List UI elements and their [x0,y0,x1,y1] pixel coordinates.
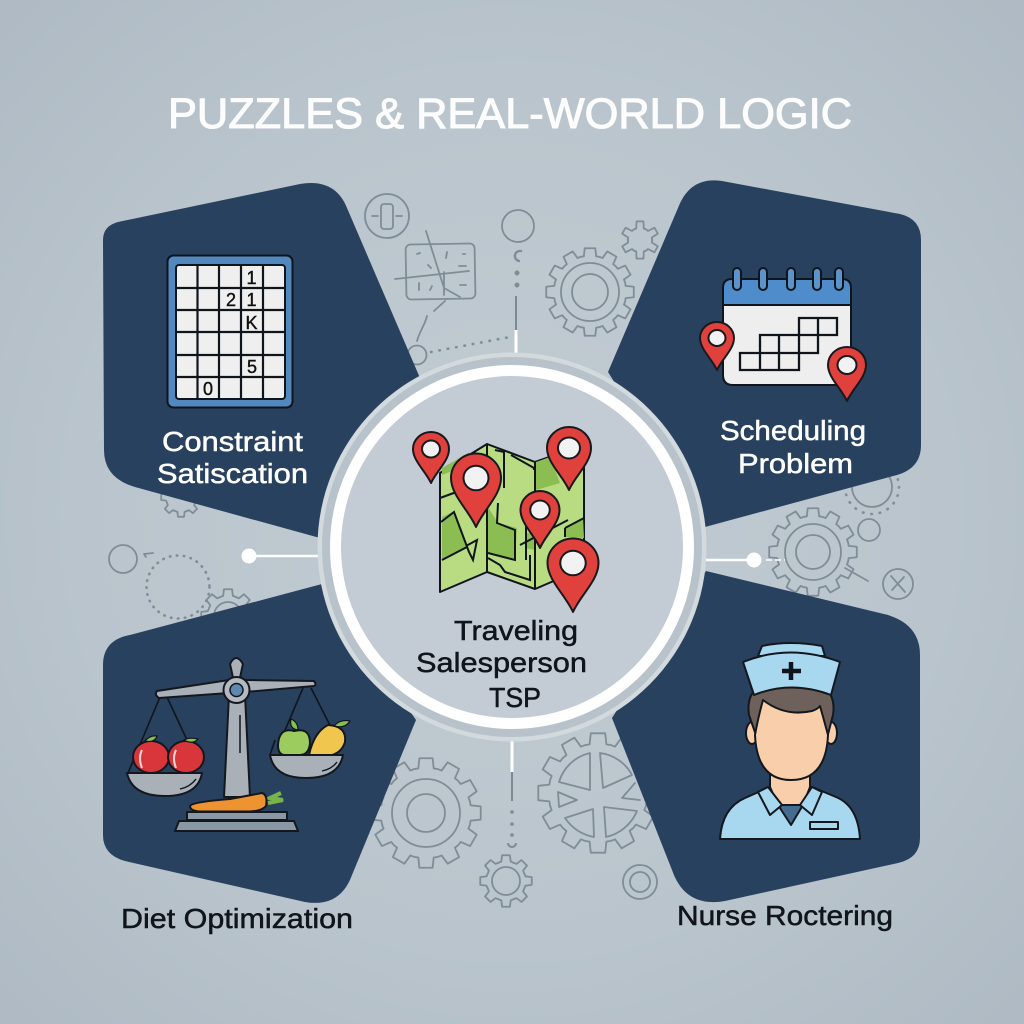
ears [746,722,758,744]
icon: large gear top [546,248,634,336]
icon: map pin 2 [451,454,501,527]
icon: calendar [723,268,851,385]
icon: balance scale with food [127,658,350,831]
icon: map pin 5 [548,538,598,612]
background doodles: gears and logic sketches [109,194,913,907]
neck [770,770,810,805]
icon: puzzle grid [168,256,292,408]
connector: top [515,296,517,353]
left pan [127,773,202,796]
mango [309,725,345,755]
icon: circled slot [365,194,409,238]
name badge [810,822,838,829]
panel: diet optimization [103,584,416,934]
panel shape [608,180,921,527]
label: tsp: TSP [489,682,541,713]
icon: gear behind constraint panel [161,477,201,517]
connector: left [242,548,320,564]
inner disc [341,376,683,718]
connector: bottom [508,740,516,847]
title: PUZZLES & REAL-WORLD LOGIC [168,90,852,138]
body [720,787,860,839]
icon: gear right middle [769,508,868,596]
icon: folded map [440,444,584,592]
icon: puzzle grid: 0 [203,379,213,399]
icon: puzzle grid: 1 [246,268,257,288]
right pan [270,755,343,778]
panel: scheduling problem [608,180,921,527]
label: nurse roctering: Nurse Roctering [677,900,893,931]
icon: gear left middle [201,589,255,643]
scale column [224,695,250,797]
icon: right pin [828,347,866,401]
label: scheduling: Scheduling [720,415,866,446]
icon: concentric rings bottom [623,865,657,899]
icon: node circle and dotted link [408,337,510,364]
scale strings [128,688,340,773]
label: constraint: Constraint [162,426,303,457]
panel: nurse rostering [612,571,920,931]
base [187,812,287,820]
scale knob and beam [156,658,316,698]
icon: left circle [109,545,137,573]
icon: puzzle grid: 1 [246,290,257,310]
icon: dotted ring right [845,460,899,514]
label: problem: Problem [738,448,853,479]
central circle: traveling salesperson [318,352,706,742]
icon: nurse [720,643,860,839]
face [755,700,828,780]
icon: map pin 3 [547,427,591,490]
icon: puzzle grid: K [245,313,258,333]
panel shape [103,183,420,538]
icon: sketched grid [395,231,475,341]
icon: small circle right [858,519,880,541]
label: satiscation: Satiscation [157,458,308,489]
panel: constraint satisfaction [103,183,420,538]
icon: map pin 4 [520,491,560,548]
icon: crossed circle right [883,569,913,599]
carrot [268,793,283,803]
label: salesperson: Salesperson [416,647,587,678]
cap cross [782,662,801,680]
panel shape [103,584,416,903]
icon: puzzle grid: 2 [226,290,236,310]
icon: dotted ring [144,553,210,618]
undershirt [778,805,803,825]
icon: map pin 1 [413,432,449,483]
connector: right [705,552,785,568]
label: traveling: Traveling [454,615,578,646]
white ring [330,365,694,729]
icon: left pin [700,322,734,370]
collar [758,787,822,815]
label: diet optimization: Diet Optimization [121,903,353,934]
left apples [133,741,169,773]
icon: top circle with dots [502,210,534,287]
green apple [278,730,310,755]
icon: spoked wheel gear [538,733,658,853]
icon: gear lower left [371,758,481,868]
outer ring [318,352,706,742]
hair [748,685,834,738]
panel shape [612,571,920,902]
cap top [758,643,825,656]
icon: small gear bottom [480,855,532,907]
cap [743,652,840,695]
icon: small gear top [621,221,659,259]
icon: puzzle grid: 5 [247,357,257,377]
